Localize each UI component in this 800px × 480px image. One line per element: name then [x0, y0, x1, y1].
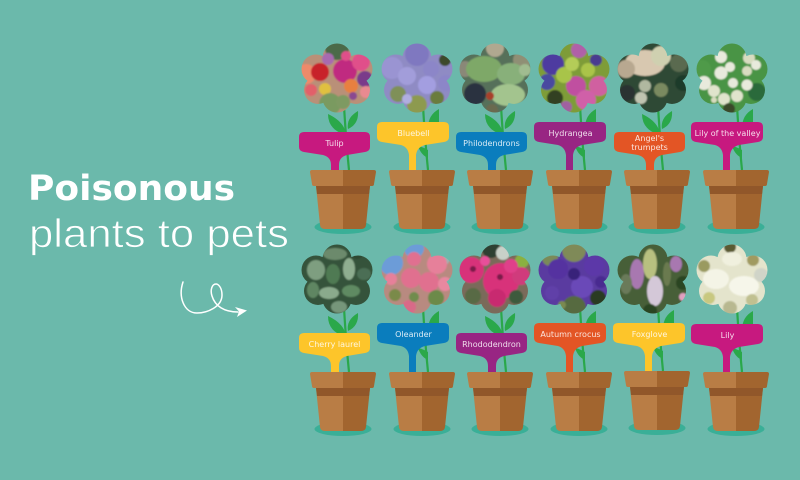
- flower photo: Foxglove: [618, 244, 688, 314]
- plant label: Rhododendron: [456, 333, 527, 374]
- flower pot: [467, 170, 533, 234]
- flower pot: [389, 372, 455, 436]
- flower photo: Cherry laurel: [302, 244, 372, 314]
- plant label: Philodendrons: [456, 132, 527, 173]
- flower photo: Autumn crocus: [538, 244, 610, 314]
- flower pot: [703, 170, 769, 234]
- flower pot: [546, 170, 612, 234]
- flower photo: Rhododendron: [460, 244, 530, 314]
- plant label: Foxglove: [613, 323, 685, 374]
- title: plants to pets: [29, 212, 289, 256]
- plant label: Rhododendron: Rhododendron: [462, 340, 521, 349]
- plant label: Foxglove: Foxglove: [632, 330, 667, 339]
- icon: curly arrow: [181, 282, 247, 317]
- flower pot: [467, 372, 533, 436]
- flower photo: Lily of the valley: [696, 44, 768, 112]
- flower pot: [310, 372, 376, 436]
- title: Poisonous: [28, 169, 235, 209]
- plant label: Autumn crocus: Autumn crocus: [540, 330, 601, 339]
- plant label: Oleander: Oleander: [395, 330, 433, 339]
- plant label: Tulip: Tulip: [324, 139, 344, 148]
- flower pot: [546, 372, 612, 436]
- flower photo: Lily: [696, 244, 768, 314]
- flower pot: [389, 170, 455, 234]
- plant: Lily: [691, 239, 772, 436]
- plant label: Angel's trumpets: [614, 132, 685, 173]
- plant label: Hydrangea: [534, 122, 606, 173]
- plant label: Cherry laurel: Cherry laurel: [309, 340, 360, 349]
- plant: Cherry laurel: [297, 239, 377, 436]
- plant label: Angel's trumpets: Angel's: [635, 134, 664, 143]
- plant: Bluebell: [377, 38, 457, 234]
- flower pot: [310, 170, 376, 234]
- plant: Rhododendron: [455, 239, 535, 436]
- flower pot: [624, 371, 690, 435]
- plant label: Philodendrons: Philodendrons: [463, 139, 520, 148]
- flower photo: Tulip: [302, 44, 372, 112]
- flower pot: [624, 170, 690, 234]
- plant label: Tulip: [299, 132, 370, 173]
- flower photo: Philodendrons: [460, 44, 530, 112]
- title: [28, 169, 289, 256]
- plant label: Angel's trumpets: trumpets: [631, 143, 668, 152]
- plant label: Hydrangea: Hydrangea: [548, 129, 593, 138]
- plant: Foxglove: [613, 239, 693, 435]
- plant label: Oleander: [377, 323, 449, 374]
- plant: Angel's trumpets: [613, 38, 693, 234]
- plant: Lily of the valley: [691, 38, 772, 234]
- plant label: Bluebell: [377, 122, 449, 173]
- flower pot: [703, 372, 769, 436]
- flower photo: Bluebell: [382, 44, 452, 112]
- plant: Philodendrons: [455, 38, 535, 234]
- plant label: Lily of the valley: Lily of the valley: [695, 129, 761, 138]
- plant label: Autumn crocus: [534, 323, 606, 374]
- plant label: Bluebell: Bluebell: [397, 129, 430, 138]
- plant label: Lily: [691, 324, 763, 375]
- plant: Hydrangea: [534, 38, 614, 234]
- flower photo: Angel's trumpets: [618, 44, 688, 112]
- plant: Autumn crocus: [534, 238, 614, 436]
- plant label: Lily of the valley: [691, 122, 763, 173]
- plant label: Cherry laurel: [299, 333, 370, 374]
- plant: Oleander: [377, 238, 457, 436]
- flower photo: Oleander: [382, 244, 452, 314]
- flower photo: Hydrangea: [538, 44, 610, 112]
- plant: Tulip: [296, 36, 377, 234]
- plant label: Lily: Lily: [721, 331, 735, 340]
